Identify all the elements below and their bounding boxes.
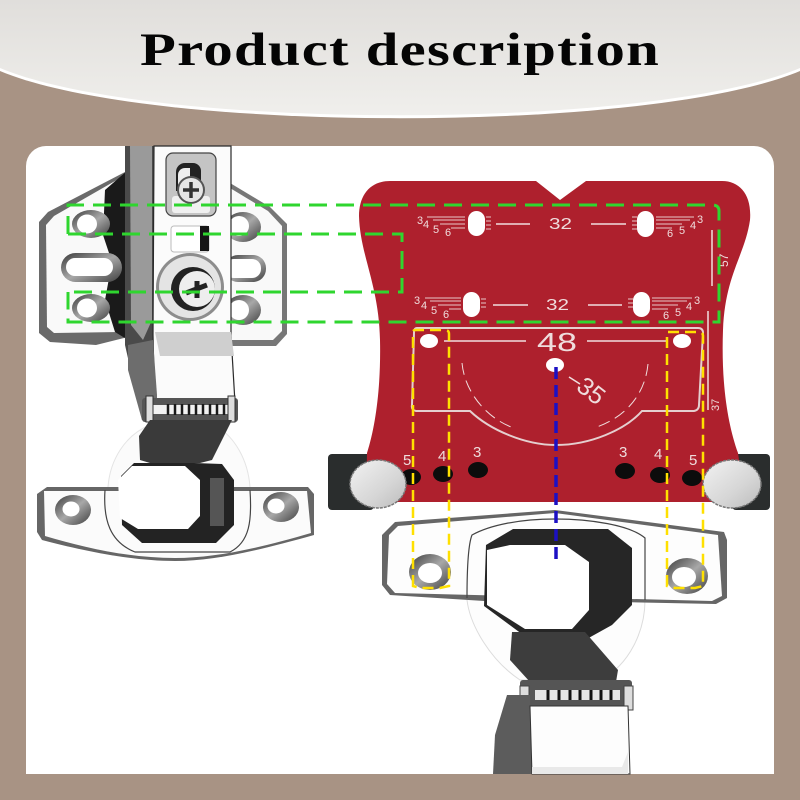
measurement labels: 6 bbox=[443, 309, 449, 321]
template holes bbox=[420, 334, 691, 372]
measurement labels: 4 bbox=[654, 446, 662, 463]
red drilling template bbox=[359, 181, 750, 502]
large screw bbox=[156, 253, 224, 321]
faint lower bracket bbox=[467, 600, 645, 680]
measurement labels: 5 bbox=[403, 452, 411, 469]
base plate bbox=[382, 510, 727, 604]
measurement labels: 37 bbox=[710, 399, 722, 411]
spring knuckle bbox=[142, 396, 238, 422]
measurement labels: 3 bbox=[697, 214, 703, 226]
measurement labels: 3 bbox=[619, 444, 627, 461]
hinge arm bbox=[125, 146, 236, 420]
right hinge, cup view bbox=[382, 510, 727, 774]
left hinge, back view bbox=[39, 146, 287, 422]
mounting holes right bbox=[225, 212, 266, 325]
measurement labels: 5 bbox=[433, 224, 439, 236]
measurement labels: 3 bbox=[417, 215, 423, 227]
measurement labels: 4 bbox=[690, 220, 696, 232]
measurement labels: 6 bbox=[663, 310, 669, 322]
mounting holes left bbox=[61, 210, 122, 322]
plate holes bbox=[55, 492, 299, 525]
right mounting plate bbox=[230, 183, 287, 346]
header band bbox=[0, 0, 800, 118]
measurement labels: 32 bbox=[546, 297, 569, 314]
measurement labels: 32 bbox=[549, 216, 572, 233]
plate holes bbox=[409, 554, 708, 594]
slot holes bbox=[463, 211, 654, 317]
base plate bbox=[37, 487, 314, 561]
measurement labels: 3 bbox=[414, 295, 420, 307]
left mounting plate bbox=[39, 170, 128, 345]
adjustment screw plate bbox=[166, 153, 216, 216]
plate body bbox=[359, 181, 750, 502]
measurement labels: 6 bbox=[667, 228, 673, 240]
scale lines bbox=[425, 217, 694, 309]
measurement labels: 6 bbox=[445, 227, 451, 239]
measurement labels: 4 bbox=[438, 448, 446, 465]
lower drill holes bbox=[401, 462, 702, 486]
measurement labels: 5 bbox=[675, 307, 681, 319]
hinge arm neck bbox=[510, 632, 618, 682]
cup opening bbox=[484, 529, 632, 640]
cup arm bbox=[139, 420, 232, 463]
yellow dashed guides bbox=[413, 330, 703, 588]
blue dashed center guide bbox=[554, 367, 558, 563]
measurement labels: 57 bbox=[717, 253, 731, 267]
distance rules bbox=[444, 224, 712, 410]
measurement labels bbox=[403, 214, 731, 469]
measurement labels: 5 bbox=[689, 452, 697, 469]
hinge recess outline bbox=[412, 328, 703, 445]
measurement labels: 4 bbox=[421, 300, 427, 312]
measurement labels: 4 bbox=[686, 301, 692, 313]
measurement labels: 5 bbox=[679, 225, 685, 237]
measurement labels: 3 bbox=[473, 444, 481, 461]
white panel bbox=[26, 146, 774, 774]
title: Product description bbox=[140, 24, 660, 76]
left thumb screw bbox=[350, 460, 406, 508]
square window bbox=[171, 226, 209, 252]
dashed arc bbox=[462, 363, 648, 428]
green dashed guides bbox=[68, 205, 719, 322]
measurement labels: 3 bbox=[694, 295, 700, 307]
measurement labels: 5 bbox=[431, 305, 437, 317]
cup bracket bbox=[467, 519, 645, 600]
measurement labels: 4 bbox=[423, 219, 429, 231]
spring knuckle bbox=[520, 680, 633, 710]
thumb screws bbox=[350, 460, 761, 508]
right thumb screw bbox=[703, 460, 761, 508]
cup opening bbox=[118, 463, 234, 543]
cup bracket outline bbox=[108, 425, 250, 530]
measurement labels: 35 bbox=[571, 372, 610, 411]
left hinge cup bbox=[37, 420, 314, 561]
lower arm bbox=[493, 695, 630, 774]
measurement labels: 48 bbox=[537, 327, 577, 357]
black sliding bar bbox=[328, 454, 770, 510]
